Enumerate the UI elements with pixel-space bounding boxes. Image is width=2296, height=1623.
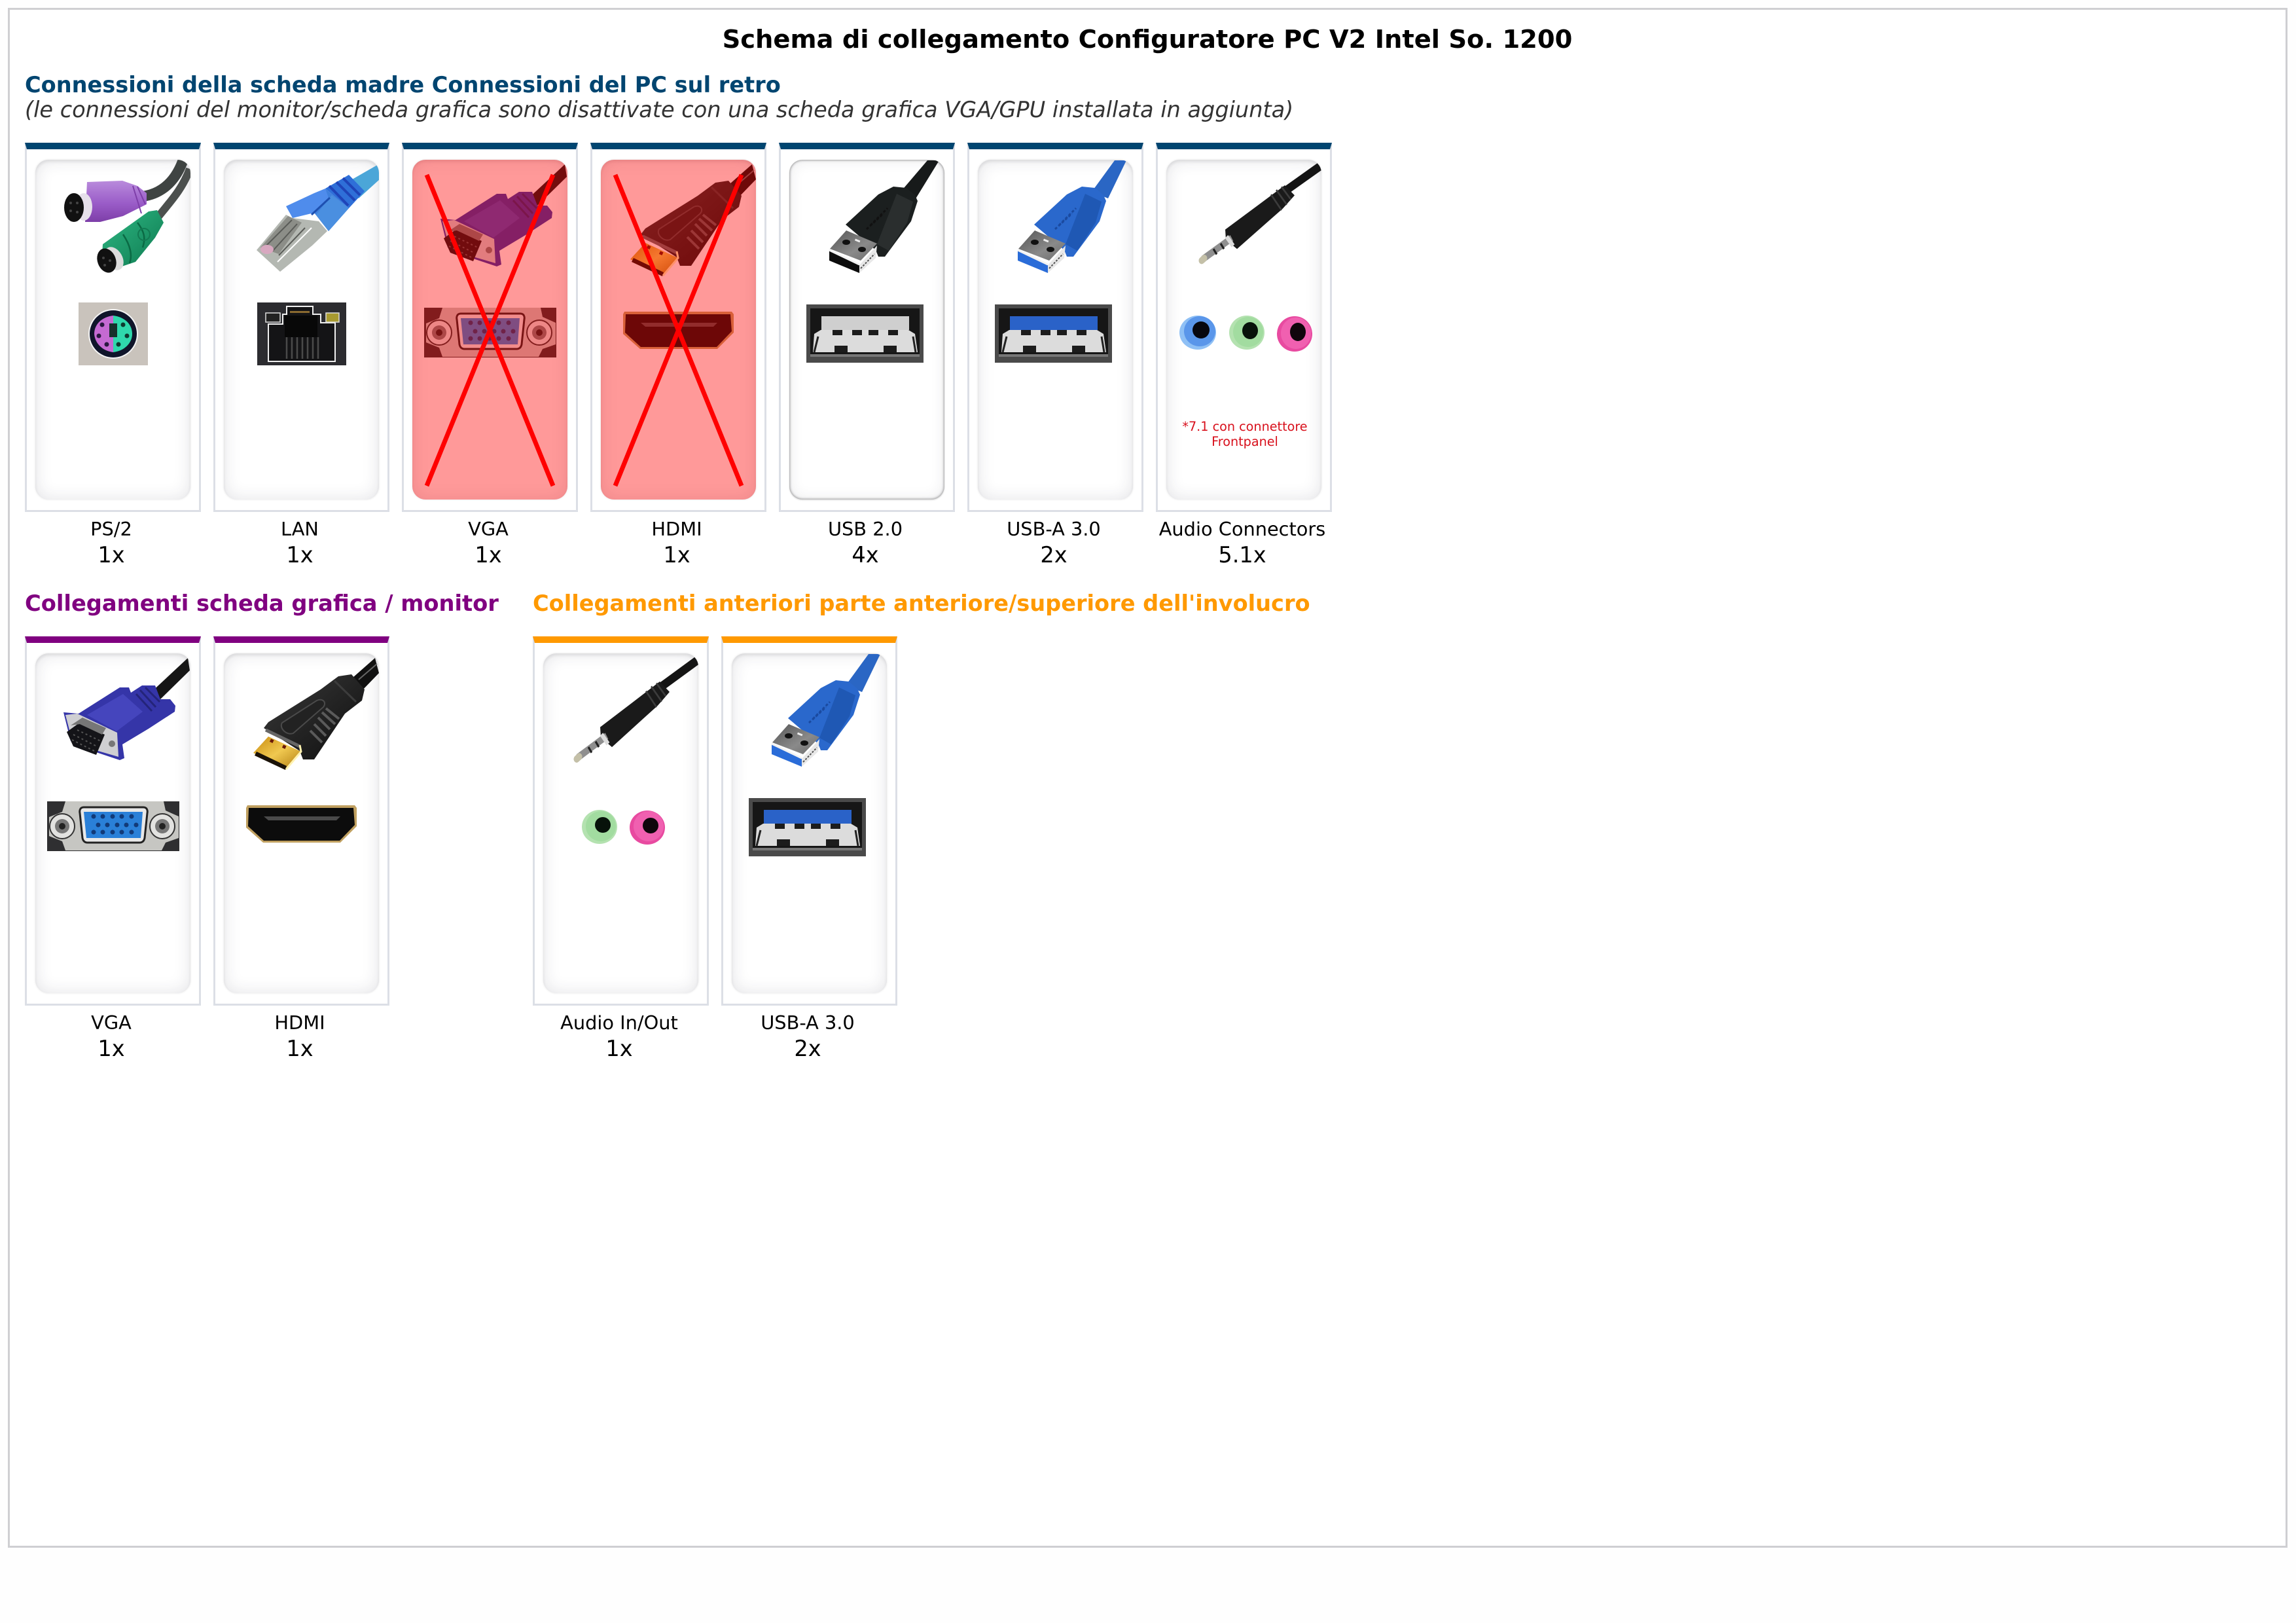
quantity: 1x <box>663 542 691 568</box>
note: 7.1 with front panel connector: *7.1 con connettore <box>1182 419 1308 434</box>
quantity: 1x <box>286 542 314 568</box>
quantity: 1x <box>98 1036 125 1061</box>
connector panel: USB-A 3.0 <box>721 636 897 1006</box>
icons: USB 2.0 plug and port <box>806 160 939 363</box>
connector panel: HDMI <box>213 636 389 1006</box>
card: Audio Connectors <box>1156 143 1332 568</box>
label: HDMI <box>651 518 702 540</box>
heading: graphics card / monitor connections: Collegamenti scheda grafica / monitor <box>25 591 499 616</box>
card: PS/2 <box>25 143 201 568</box>
icons: USB 3.0 plug and port <box>749 654 880 856</box>
label: VGA <box>91 1012 132 1034</box>
connector panel: PS/2 <box>25 143 201 512</box>
panel background <box>543 653 698 993</box>
red cross <box>424 174 555 487</box>
label: HDMI <box>274 1012 325 1034</box>
connector panel: LAN <box>213 143 389 512</box>
panel background <box>732 653 887 993</box>
quantity: 1x <box>475 542 502 568</box>
note: 7.1 with front panel connector: Frontpanel <box>1211 434 1278 449</box>
connector panel: USB 2.0 <box>779 143 955 512</box>
card: HDMI disabled <box>590 143 766 568</box>
icons: HDMI cable and port <box>623 164 756 349</box>
label: Audio In/Out <box>560 1012 678 1034</box>
connector panel: Audio <box>1156 143 1332 512</box>
connector panel: Audio <box>533 636 709 1006</box>
panel background <box>601 160 756 500</box>
quantity: 2x <box>1040 542 1067 568</box>
note: 7.1 with front panel connector <box>1182 419 1308 449</box>
icons: audio jack and two sockets <box>573 657 698 845</box>
connector panel: VGA <box>402 143 578 512</box>
card: front USB-A 3.0 <box>721 636 897 1061</box>
quantity: 2x <box>794 1036 821 1061</box>
label: PS/2 <box>90 518 132 540</box>
label: LAN <box>281 518 319 540</box>
label: Audio Connectors <box>1159 518 1325 540</box>
panel background <box>35 160 190 500</box>
icons: RJ45 cable and port <box>257 165 379 365</box>
icons: audio jack and three sockets <box>1179 163 1321 352</box>
connector panel: VGA <box>25 636 201 1006</box>
quantity: 1x <box>605 1036 633 1061</box>
card: USB-A 3.0 <box>967 143 1143 568</box>
card: VGA disabled <box>402 143 578 568</box>
quantity: 1x <box>286 1036 314 1061</box>
connector panel: HDMI <box>590 143 766 512</box>
subheading note: (le connessioni del monitor/scheda grafica sono disattivate con una scheda grafica VGA/GPU installata in aggiunta) <box>25 97 1293 122</box>
card: USB 2.0 <box>779 143 955 568</box>
quantity: 5.1x <box>1218 542 1266 568</box>
title: Schema di collegamento Configuratore PC V2 Intel So. 1200 <box>723 25 1572 54</box>
label: VGA <box>468 518 509 540</box>
heading: motherboard rear connections: Connessioni della scheda madre Connessioni del PC sul retro <box>25 72 781 98</box>
panel background <box>412 160 567 500</box>
panel background <box>35 653 190 993</box>
icons: HDMI cable and port <box>246 658 379 843</box>
label: USB-A 3.0 <box>1007 518 1101 540</box>
panel background <box>1166 160 1321 500</box>
red disabled overlay <box>412 160 567 500</box>
icons: VGA cable and port <box>424 165 567 357</box>
panel background <box>978 160 1133 500</box>
panel background <box>224 160 379 500</box>
panel background <box>789 160 944 500</box>
label: USB-A 3.0 <box>761 1012 855 1034</box>
heading: front connections: Collegamenti anteriori parte anteriore/superiore dell'involucro <box>533 591 1310 616</box>
quantity: 1x <box>98 542 125 568</box>
icons: PS/2 cable and port <box>64 160 190 365</box>
icons: USB 3.0 plug and port <box>995 160 1126 363</box>
label: USB 2.0 <box>828 518 903 540</box>
red disabled overlay <box>601 160 756 500</box>
icons: VGA cable and port <box>47 659 190 851</box>
panel background <box>224 653 379 993</box>
card: graphics HDMI <box>213 636 389 1061</box>
quantity: 4x <box>852 542 879 568</box>
red cross <box>613 174 744 487</box>
connector panel: USB-A 3.0 <box>967 143 1143 512</box>
card: graphics VGA <box>25 636 201 1061</box>
card: front Audio In/Out <box>533 636 709 1061</box>
card: LAN <box>213 143 389 568</box>
